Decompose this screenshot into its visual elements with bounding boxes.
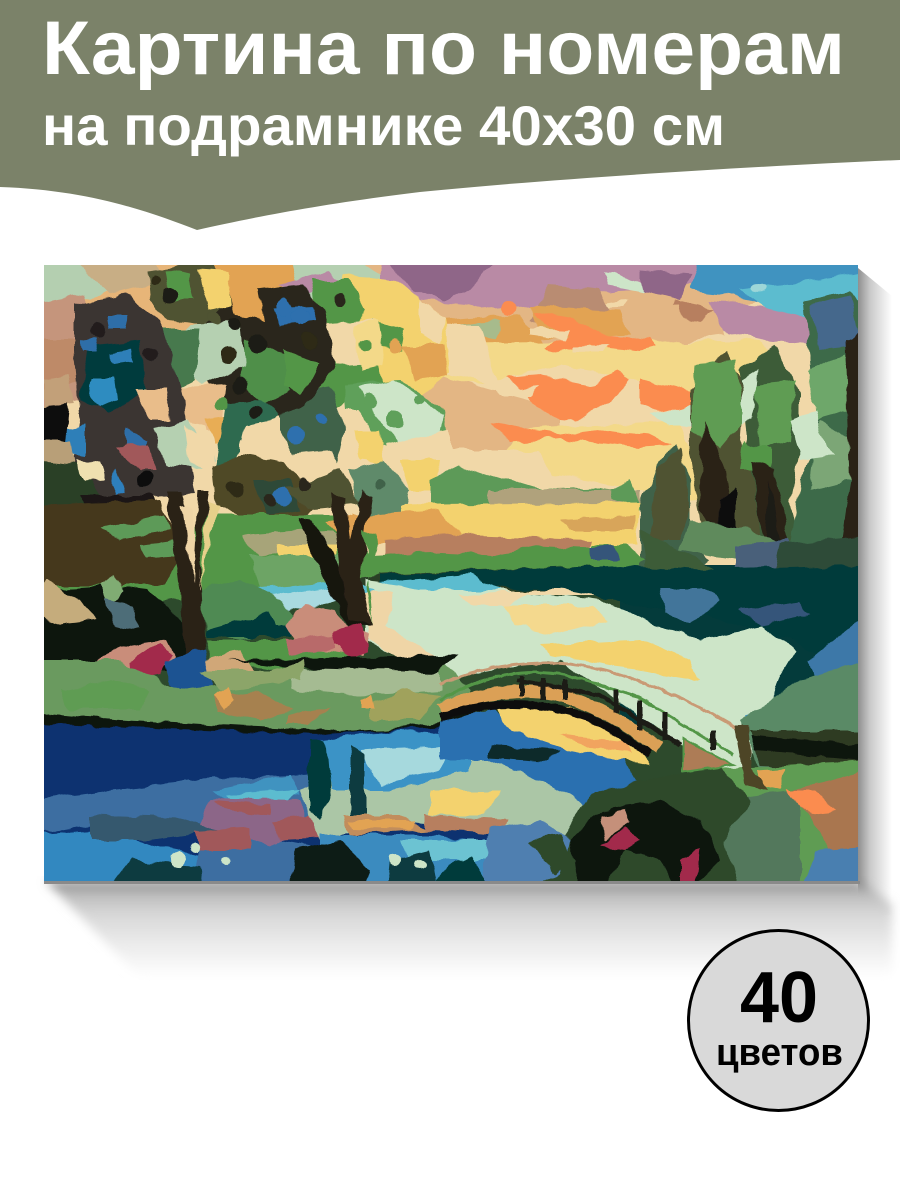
pale water: [365, 580, 795, 780]
sky: pale highlights: [495, 270, 768, 425]
header banner: [0, 0, 900, 230]
front water: [44, 723, 488, 856]
trunks of left trees: [168, 490, 205, 655]
flowers: pink and red bushes: [285, 605, 370, 655]
canvas shadow: [44, 268, 892, 978]
foreground bushes: [543, 768, 750, 881]
painting: park with bridge at sunset: [30, 255, 870, 900]
bridge: [440, 663, 768, 790]
blue water under bridge: [440, 710, 640, 815]
title: Картина по номерам: [42, 6, 845, 91]
colours label: цветов: [716, 1032, 843, 1074]
right tree mass: [640, 445, 710, 575]
left meadow: [44, 498, 176, 588]
sky: colour bands: [44, 265, 858, 501]
left shrubs: [44, 584, 186, 671]
sky: orange streaks: [490, 312, 695, 447]
number of colours: 40: [740, 958, 818, 1038]
dark teal water: [379, 564, 858, 602]
colour count badge: [688, 930, 868, 1110]
left and centre tree canopies: [30, 262, 450, 525]
subtitle: на подрамнике 40х30 см: [42, 94, 725, 157]
right bank: [740, 663, 858, 768]
golden field: [401, 500, 640, 547]
distant tree line: [430, 465, 640, 510]
dark shoreline: [44, 711, 476, 736]
island bank: [30, 660, 470, 735]
far bank: [372, 545, 640, 575]
